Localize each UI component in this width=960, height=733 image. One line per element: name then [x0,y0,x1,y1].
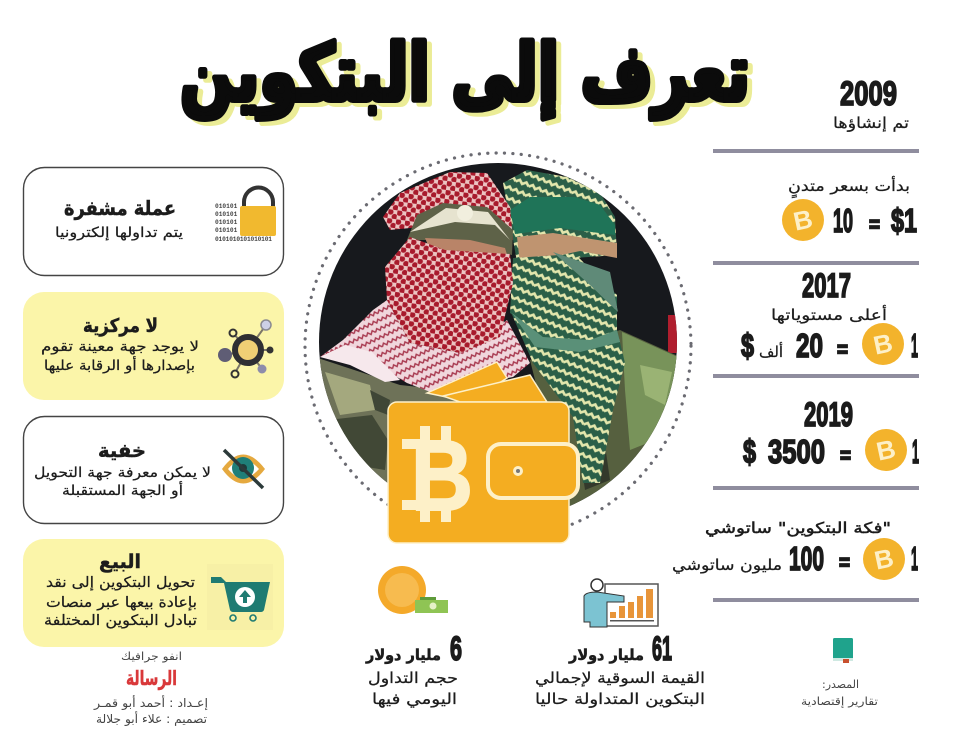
icon: padlock with binary digits: 010101 [215,219,238,226]
timeline: peak 2017: ألف [759,342,783,361]
icon: presenter with bar chart [584,579,658,627]
timeline: starting price: = [869,212,880,237]
panel: decentralized [23,292,284,400]
icon: gold coin with banknote [378,566,448,614]
stat: market cap: البتكوين المتداولة حاليا [535,690,705,708]
title: تعرف إلى البتكوين [180,29,750,120]
right figure body [530,330,680,520]
left figure shoulders [320,300,530,393]
icon: network nodes [218,320,274,378]
right figure mask [510,254,617,340]
stat: daily trading volume: 6 [450,630,462,668]
timeline: price 2019: 2019 [804,396,853,434]
right figure lower scarf [510,310,625,483]
photo: two figures in patterned scarves [319,163,677,506]
timeline: peak 2017: 2017 [802,267,851,305]
credits: إعـداد : أحمد أبو قمـر [93,695,208,711]
text: 1 [911,327,918,364]
icon: padlock with binary digits: 010101 [215,211,238,218]
icon: bitcoin coin: B [872,542,896,576]
wallet icon [388,362,578,543]
text: decentralized description: لا يوجد جهة معينة تقوم [41,339,199,355]
wallet clasp [488,444,578,498]
icon: bitcoin coin: B [874,433,898,467]
left figure body [320,358,456,483]
icon: bitcoin coin: B [871,327,895,361]
icon: padlock with binary digits: 010101 [215,203,238,210]
icon: padlock with binary digits [215,188,276,243]
timeline: price 2019: 3500 [768,433,825,470]
icon: crossed-out eye [222,450,265,488]
timeline: peak 2017: 20 [796,327,823,364]
icon: padlock with binary digits: 010101 [215,227,238,234]
wallet cards [427,362,507,402]
heading: selling: البيع [99,551,141,573]
right figure head scarf [503,170,617,262]
stat: market cap: مليار دولار [568,646,644,664]
heading: decentralized: لا مركزية [83,315,158,337]
timeline: starting price: بدأت بسعر متدنٍ [788,176,910,198]
left figure head wrap [383,172,513,240]
timeline: created 2009 [833,75,909,132]
text: 1 [911,540,918,577]
bitcoin symbol: B [411,420,473,532]
source: تقارير إقتصادية [801,695,878,708]
icon: shopping cart with up arrow [207,564,273,630]
timeline: price 2019: = [840,443,851,468]
panel: encrypted currency [24,168,284,276]
timeline: peak 2017 [741,267,918,365]
red accents [668,315,677,353]
heading: hidden: خفية [98,440,146,462]
text: selling description [44,575,197,629]
stat: daily trading volume [365,566,462,709]
timeline: starting price: $1 [891,202,917,239]
text: decentralized description: بإصدارها أو الرقابة عليها [44,356,195,374]
timeline: satoshi: "فكة البتكوين" ساتوشي [705,519,891,538]
text: hidden description [34,465,211,499]
left figure mask [385,237,513,353]
timeline: satoshi: = [839,550,850,575]
stat: market cap: القيمة السوقية لإجمالي [535,669,705,688]
credits: تصميم : علاء أبو جلالة [96,711,207,727]
timeline: starting price [782,176,917,241]
timeline: created 2009: 2009 [840,75,897,113]
timeline: price 2019 [743,396,919,471]
text: 1 [912,433,919,470]
stat: daily trading volume: مليار دولار [365,646,441,664]
icon: bitcoin coin [865,429,907,471]
source: المصدر: [822,678,859,691]
panel: hidden [24,416,284,524]
icon: bitcoin coin [863,538,905,580]
heading: encrypted currency: عملة مشفرة [64,196,176,220]
timeline: created 2009: تم إنشاؤها [833,114,909,132]
timeline: peak 2017: $ [741,327,754,364]
timeline: starting price: 10 [833,202,853,239]
panel: selling [23,539,284,647]
stat: market cap [535,579,705,708]
timeline: price 2019: $ [743,433,756,470]
icon: bitcoin coin: B [791,203,815,237]
text: selling description: بإعادة بيعها عبر منصات [46,595,197,611]
icon: book [833,638,853,663]
text: selling description: تحويل البتكوين إلى نقد [46,575,195,591]
credits: انفو جرافيك [121,650,182,663]
stat: daily trading volume: اليومي فيها [372,690,457,709]
text: hidden description: لا يمكن معرفة جهة التحويل [34,465,211,481]
text: encrypted currency description: يتم تداولها إلكترونيا [55,225,183,241]
text: decentralized description [41,339,199,374]
text: selling description: تبادل البتكوين المختلفة [44,613,197,629]
dotted ring [305,153,691,539]
timeline: peak 2017: = [837,337,848,362]
logo: Al-Resalah: الرسالة [126,666,177,690]
stat: daily trading volume: حجم التداول [368,669,458,687]
timeline: satoshi [672,519,918,580]
stat: market cap: 61 [652,630,672,668]
timeline: satoshi: 100 [789,540,824,577]
icon: padlock with binary digits: 0101010101010101 [215,236,272,243]
source [801,638,878,708]
icon: bitcoin coin [862,323,904,365]
text: hidden description: أو الجهة المستقبلة [62,481,183,499]
credits [93,650,208,727]
timeline: satoshi: مليون ساتوشي [672,556,782,575]
timeline: peak 2017: أعلى مستوياتها [771,305,887,324]
